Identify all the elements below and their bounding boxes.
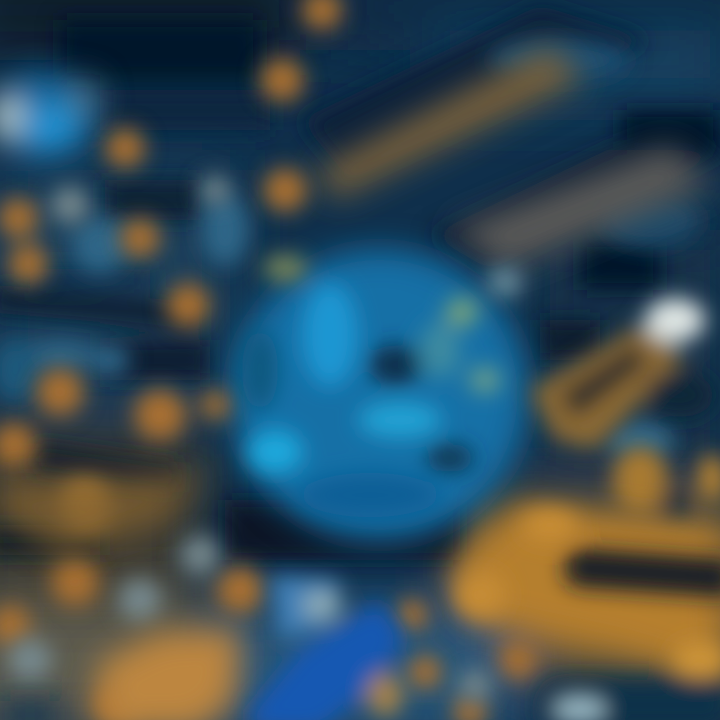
orange solder dots	[0, 0, 537, 720]
orange block, bottom left	[0, 630, 240, 720]
icon: bright blue blob, top left	[0, 73, 99, 157]
central blue sphere	[232, 249, 528, 541]
pale grey dots	[8, 175, 491, 701]
large orange traces, lower right	[450, 505, 720, 680]
orange traces, left	[0, 470, 205, 555]
diagonal brown traces	[315, 45, 715, 270]
bright blue block, bottom centre	[250, 575, 405, 720]
pale blue grid highlights	[0, 38, 700, 460]
orange striped component, right	[530, 298, 720, 520]
dark traces	[0, 5, 720, 560]
